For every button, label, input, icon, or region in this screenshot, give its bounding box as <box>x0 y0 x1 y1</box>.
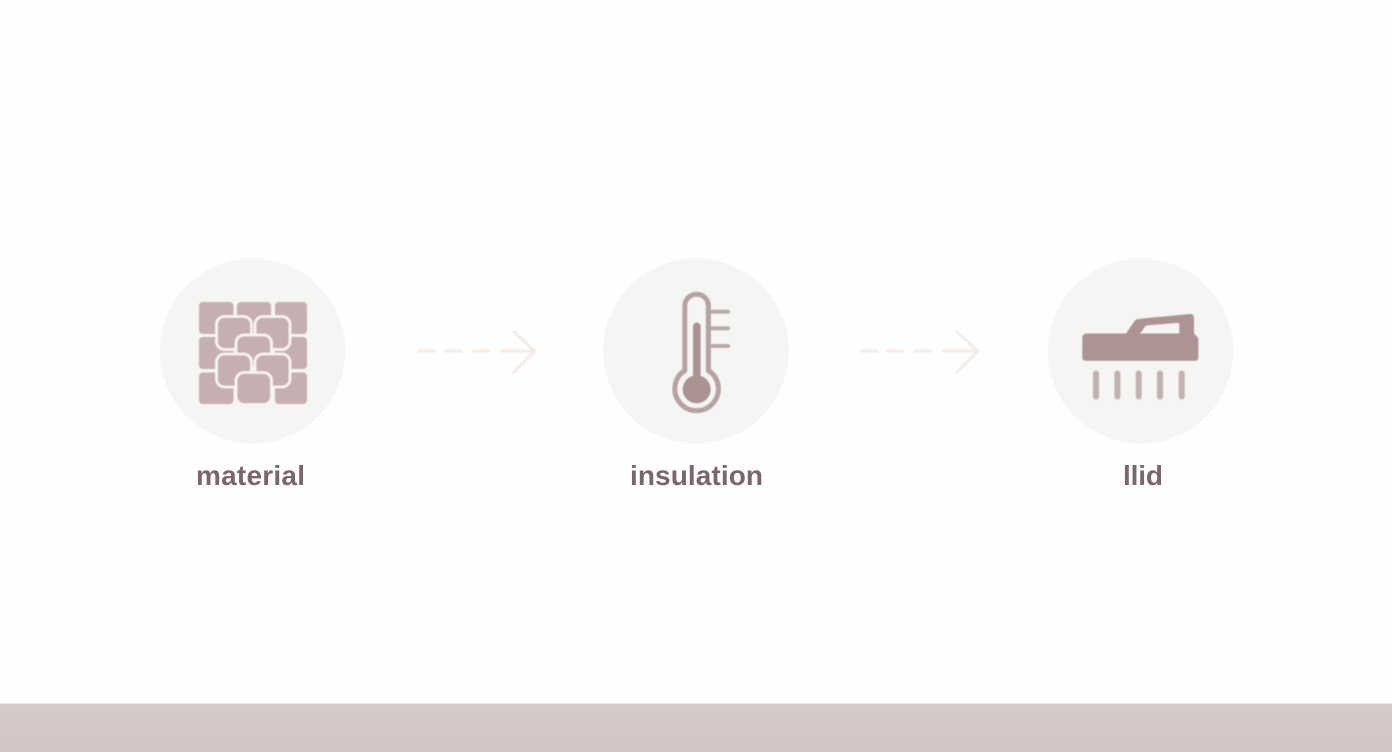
label: material: material <box>196 460 305 491</box>
material circle <box>160 258 345 444</box>
arrow: material to insulation <box>419 332 535 372</box>
icon: lid with vents <box>1082 314 1198 400</box>
label: lid: llid <box>1123 460 1163 491</box>
panel: insulation <box>603 258 789 491</box>
panel: material <box>160 258 345 491</box>
panel: lid <box>1048 258 1233 491</box>
arrow: insulation to lid <box>861 332 978 372</box>
icon: overlapping tiles <box>199 302 307 404</box>
label: insulation: insulation <box>630 460 763 491</box>
lid circle <box>1048 258 1233 444</box>
icon: thermometer <box>675 294 728 411</box>
insulation circle <box>603 258 789 444</box>
bottom band <box>0 704 1392 752</box>
